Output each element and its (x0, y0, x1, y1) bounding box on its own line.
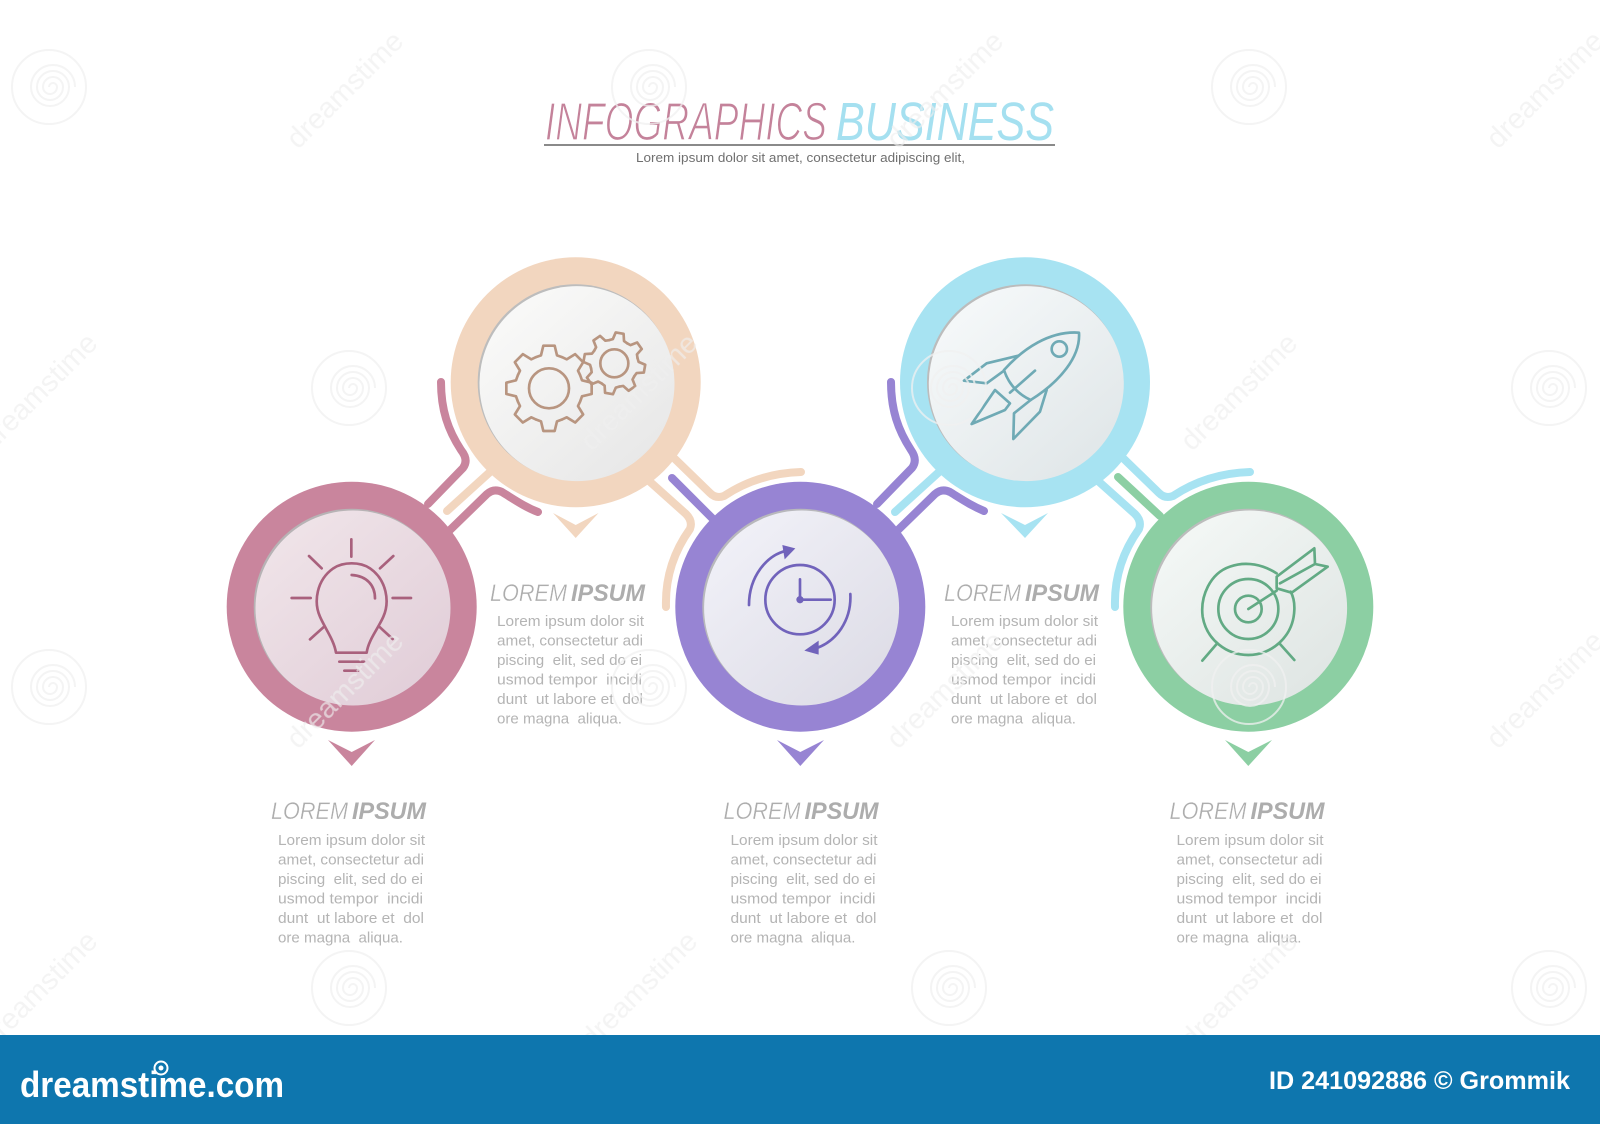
text block: purple (724, 798, 879, 946)
text block: purple: IPSUM (804, 798, 879, 825)
chevron: rose (328, 740, 375, 766)
text block: peach: amet, consectetur adi (497, 634, 643, 650)
text block: purple: LOREM (724, 798, 800, 825)
title: BUSINESS (836, 92, 1054, 152)
footer bar (0, 1035, 1600, 1124)
text block: blue: IPSUM (1025, 580, 1100, 607)
title: INFOGRAPHICS (545, 92, 827, 152)
text block: peach: LOREM (490, 580, 567, 607)
text block: peach: dunt ut labore et dol (497, 692, 643, 708)
connector: purple arms (877, 382, 984, 530)
text block: purple: dunt ut labore et dol (730, 911, 876, 927)
icon: gears (506, 328, 650, 431)
text block: green: Lorem ipsum dolor sit (1176, 833, 1324, 849)
connector: green stub to blue (1118, 477, 1160, 516)
text block: purple: piscing elit, sed do ei (730, 872, 876, 888)
icon: clock with arrows (749, 545, 850, 655)
watermark: diagonal text: dreamstime (574, 925, 704, 1055)
circle: green ring (1123, 482, 1373, 732)
icon: target with arrow (1202, 548, 1328, 661)
text block: rose: Lorem ipsum dolor sit (278, 833, 425, 849)
connector: blue arms (1097, 459, 1250, 607)
chevron: green (1225, 740, 1272, 766)
circle: blue ring (900, 257, 1150, 507)
chevron: purple (777, 740, 824, 766)
chevron: blue (1001, 513, 1048, 538)
text block: blue: ore magna aliqua. (951, 712, 1076, 728)
text block: peach: ore magna aliqua. (497, 712, 622, 728)
text block: blue: dunt ut labore et dol (951, 692, 1097, 708)
text block: rose: IPSUM (352, 798, 427, 825)
watermark: diagonal text: dreamstime (1174, 925, 1304, 1055)
text block: blue: amet, consectetur adi (951, 634, 1097, 650)
text block: green: IPSUM (1250, 798, 1325, 825)
text block: rose: amet, consectetur adi (278, 852, 424, 868)
text block: purple: usmod tempor incidi (730, 892, 876, 908)
text block: purple: amet, consectetur adi (730, 852, 876, 868)
text block: rose: piscing elit, sed do ei (278, 872, 423, 888)
text block: green: piscing elit, sed do ei (1176, 872, 1322, 888)
text block: rose: LOREM (271, 798, 348, 825)
circle: purple ring (675, 482, 925, 732)
icon: rocket (964, 333, 1079, 439)
text block: purple: ore magna aliqua. (730, 930, 856, 946)
text block: blue: LOREM (944, 580, 1021, 607)
text block: green: amet, consectetur adi (1176, 852, 1322, 868)
circle: peach ring (451, 257, 701, 507)
connector: peach stub to rose (447, 472, 490, 511)
text block: rose (271, 798, 427, 946)
footer logo: dreamstime.com (20, 1064, 284, 1105)
watermark: diagonal text: dreamstime (574, 327, 704, 457)
connector: rose arms (428, 382, 538, 530)
connector: purple stub to peach (672, 478, 713, 519)
footer credit: ID 241092886 © Grommik (1269, 1067, 1570, 1095)
text block: purple: Lorem ipsum dolor sit (730, 833, 878, 849)
watermark: diagonal text: dreamstime (280, 25, 410, 155)
text block: rose: ore magna aliqua. (278, 930, 403, 946)
text block: peach: piscing elit, sed do ei (497, 653, 642, 669)
text block: peach: IPSUM (571, 580, 646, 607)
text block: peach: Lorem ipsum dolor sit (497, 614, 644, 630)
text block: rose: dunt ut labore et dol (278, 911, 424, 927)
text block: blue (944, 580, 1100, 728)
text block: peach: usmod tempor incidi (497, 672, 642, 688)
text block: green: usmod tempor incidi (1176, 892, 1322, 908)
text block: rose: usmod tempor incidi (278, 892, 423, 908)
text block: blue: usmod tempor incidi (951, 672, 1096, 688)
subtitle: Lorem ipsum dolor sit amet, consectetur adipiscing elit, (636, 150, 965, 165)
watermark: diagonal text: dreamstime (1174, 327, 1304, 457)
text block: green (1170, 798, 1325, 946)
circle: rose ring (227, 482, 477, 732)
watermark: diagonal text: dreamstime (880, 625, 1010, 755)
text block: green: LOREM (1170, 798, 1246, 825)
icon: light bulb (292, 539, 411, 671)
watermark: diagonal text: dreamstime (280, 625, 410, 755)
watermark: diagonal text: dreamstime (880, 25, 1010, 155)
text block: green: ore magna aliqua. (1176, 930, 1302, 946)
text block: green: dunt ut labore et dol (1176, 911, 1322, 927)
connector: blue stub to purple (895, 472, 939, 512)
text block: peach (490, 580, 646, 728)
text block: blue: piscing elit, sed do ei (951, 653, 1096, 669)
chevron: peach (553, 513, 598, 538)
connector: peach arms (648, 459, 801, 607)
text block: blue: Lorem ipsum dolor sit (951, 614, 1098, 630)
